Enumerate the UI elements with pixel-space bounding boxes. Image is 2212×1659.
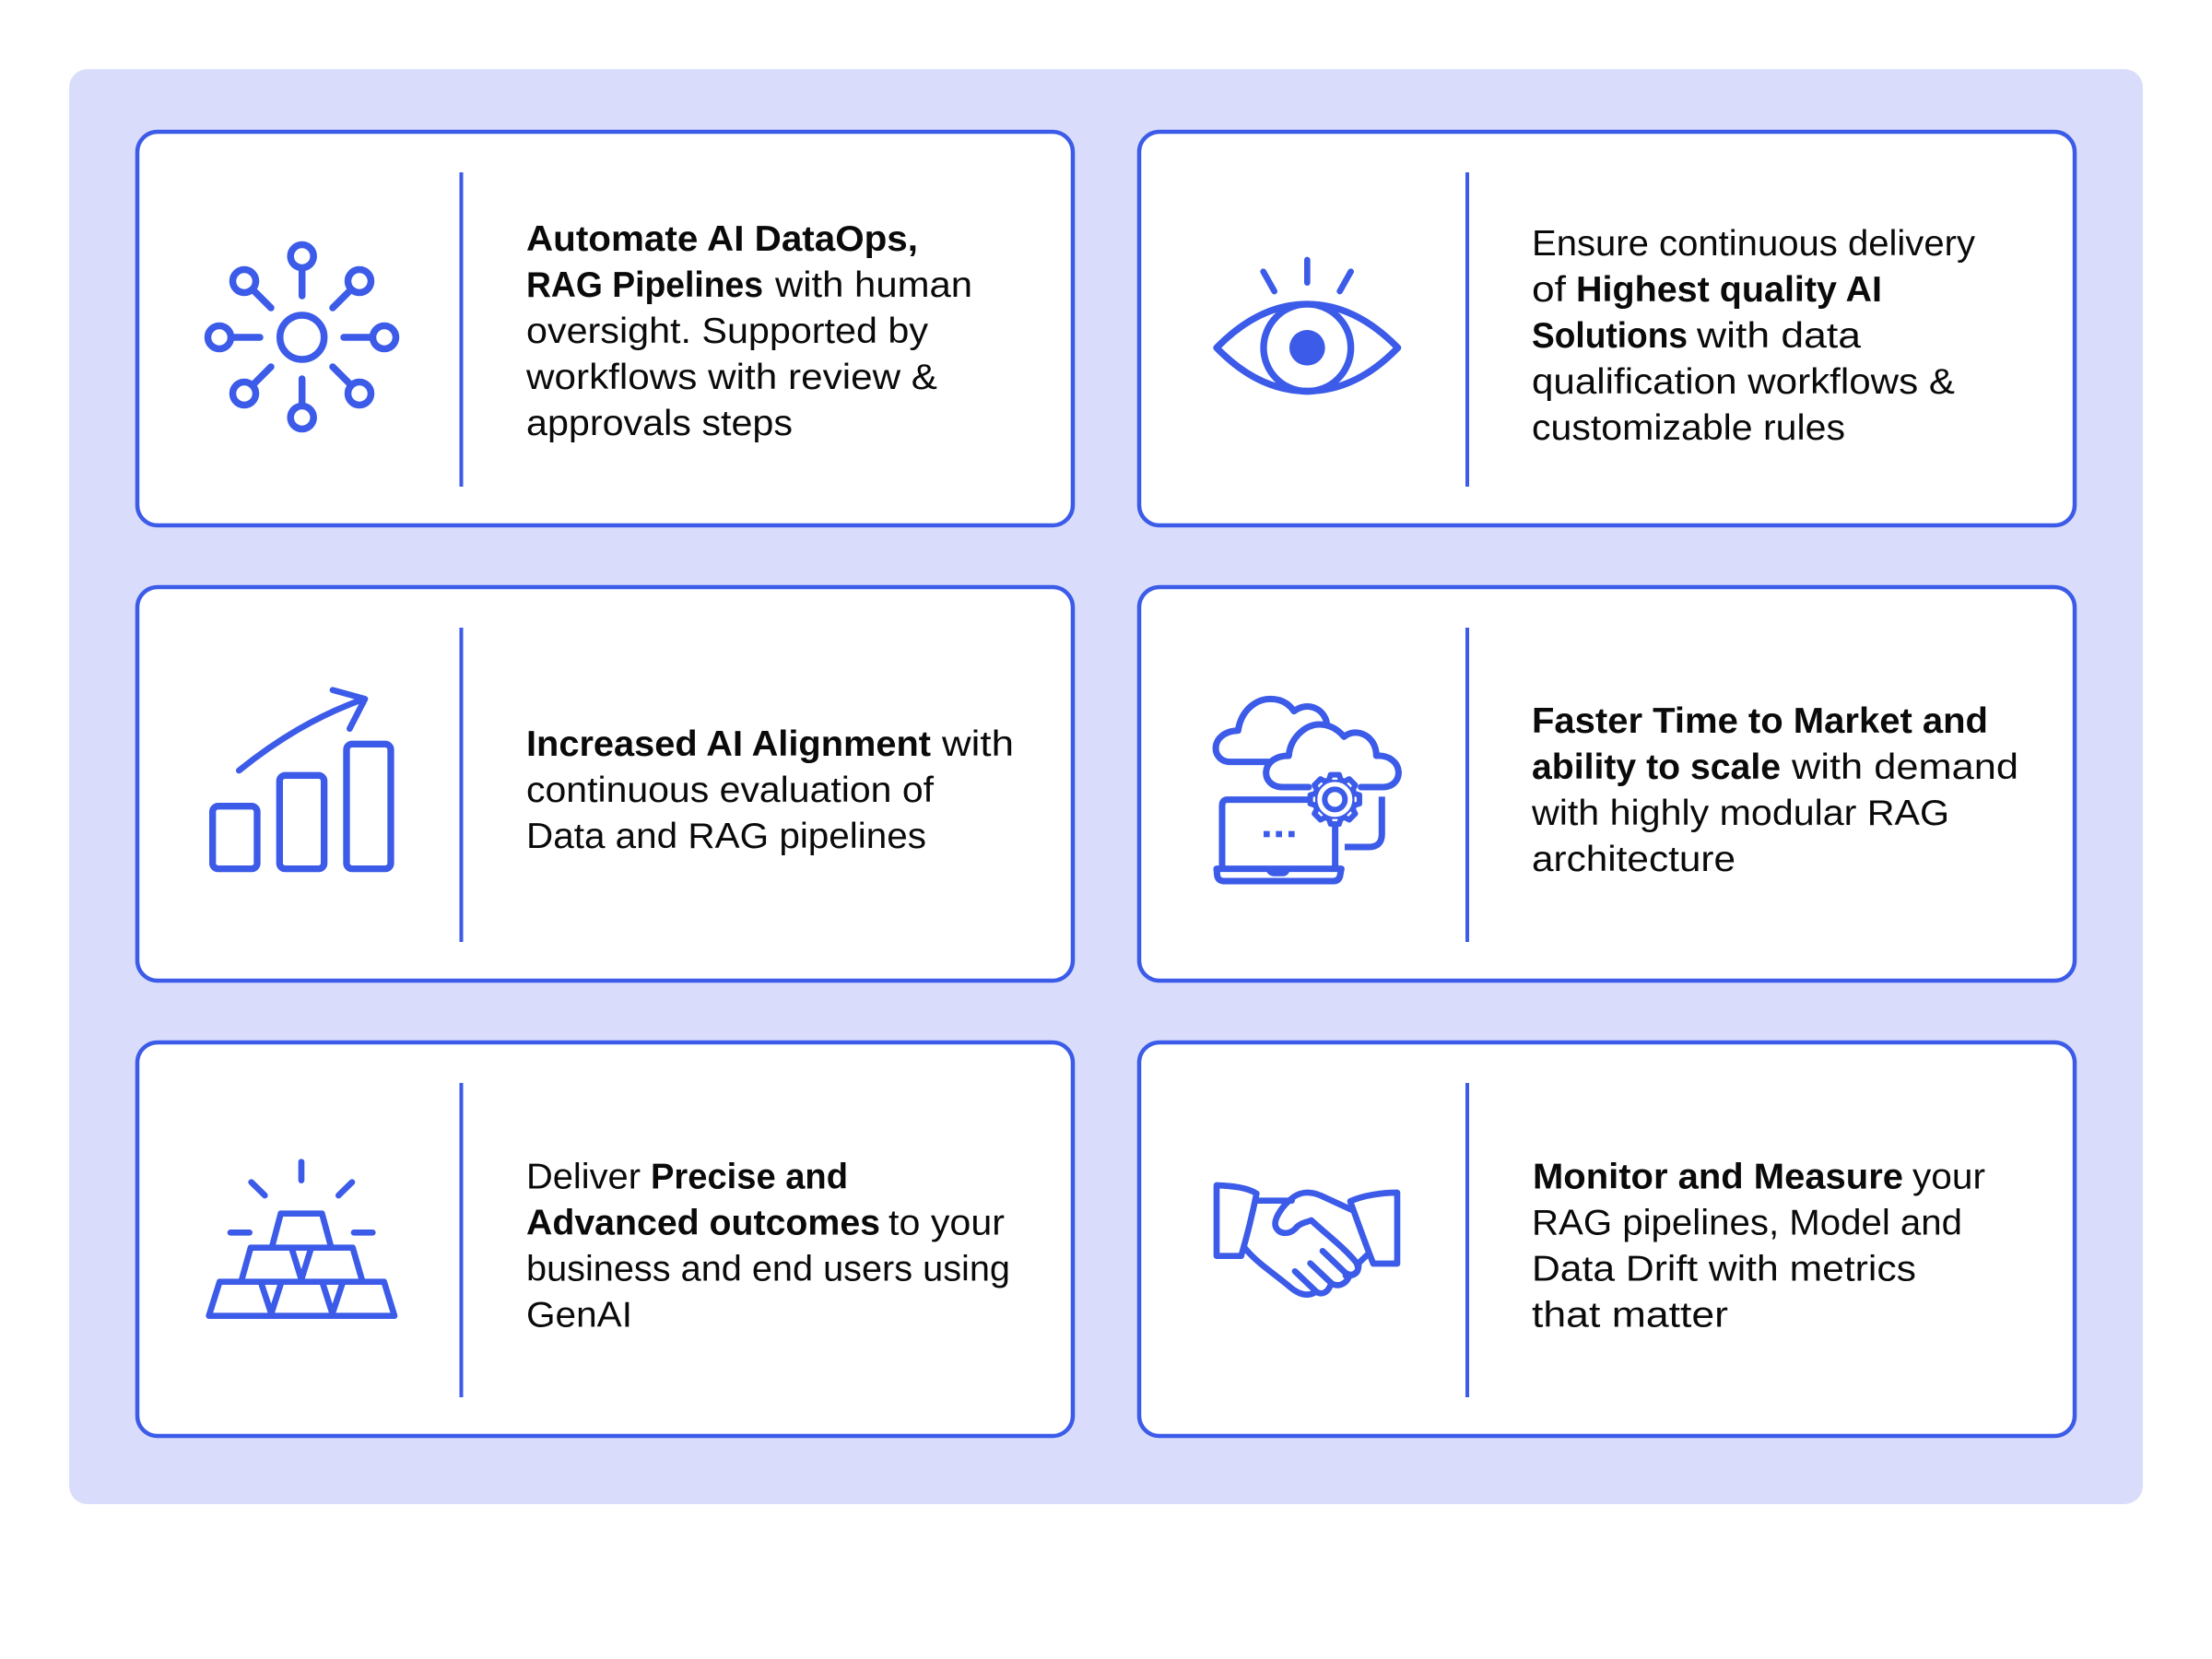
icon: rising bar chart (213, 690, 391, 869)
text: quality description: Highest quality AI (1576, 270, 1882, 310)
text: alignment description: continuous evaluation of (526, 771, 934, 810)
text: automate description: with human (774, 265, 972, 305)
icon: eye (1217, 260, 1398, 392)
text: quality description: Solutions (1532, 316, 1688, 356)
text: quality description: with data (1696, 316, 1861, 356)
text: automate description (525, 219, 972, 443)
text: market description: architecture (1532, 840, 1735, 879)
icon: network hub (208, 245, 396, 429)
text: market description: with demand (1791, 747, 2018, 787)
text: outcomes description: Deliver (526, 1158, 641, 1196)
text: outcomes description: business and end users using (526, 1250, 1010, 1288)
text: alignment description: with (941, 724, 1014, 764)
text: monitor description: your (1912, 1158, 1985, 1196)
icon: gold bars (209, 1162, 394, 1316)
text: outcomes description: to your (888, 1204, 1005, 1242)
text: quality description: customizable rules (1532, 408, 1845, 448)
text: outcomes description (526, 1158, 1010, 1335)
panel: automate AI DataOps (137, 132, 1073, 525)
text: quality description: qualification workflows & (1532, 362, 1955, 402)
text: monitor description (1532, 1158, 1985, 1335)
text: market description: with highly modular RAG (1531, 794, 1949, 833)
text: alignment description: Data and RAG pipelines (526, 817, 926, 856)
text: automate description: Automate AI DataOps, (526, 219, 918, 259)
text: quality description: of (1532, 270, 1566, 310)
text: automate description: approvals steps (526, 404, 793, 443)
text: monitor description: Monitor and Measure (1533, 1158, 1903, 1196)
text: monitor description: that matter (1532, 1296, 1728, 1335)
text: automate description: oversight. Supported by (526, 312, 929, 351)
icon: cloud laptop gear (1216, 699, 1398, 881)
text: outcomes description: Advanced outcomes (526, 1204, 880, 1242)
panel: highest quality AI (1139, 132, 2075, 525)
text: automate description: RAG Pipelines (526, 265, 763, 305)
text: outcomes description: GenAI (526, 1296, 632, 1335)
text: monitor description: RAG pipelines, Model and (1532, 1204, 1962, 1242)
panel: faster time to market (1139, 587, 2075, 981)
text: monitor description: Data Drift with metrics (1532, 1250, 1916, 1288)
text: alignment description (526, 724, 1014, 856)
text: automate description: workflows with review & (525, 358, 937, 397)
text: quality description: Ensure continuous delivery (1532, 224, 1975, 264)
text: quality description (1532, 224, 1975, 448)
text: alignment description: Increased AI Alignment (526, 724, 931, 764)
panel: precise outcomes (137, 1042, 1073, 1436)
panel: increased AI alignment (137, 587, 1073, 981)
panel: monitor and measure (1139, 1042, 2075, 1436)
text: market description: ability to scale (1532, 747, 1781, 787)
icon: handshake (1217, 1185, 1397, 1295)
text: outcomes description: Precise and (651, 1158, 848, 1196)
text: market description: Faster Time to Market and (1532, 701, 1988, 741)
text: market description (1531, 701, 2018, 879)
